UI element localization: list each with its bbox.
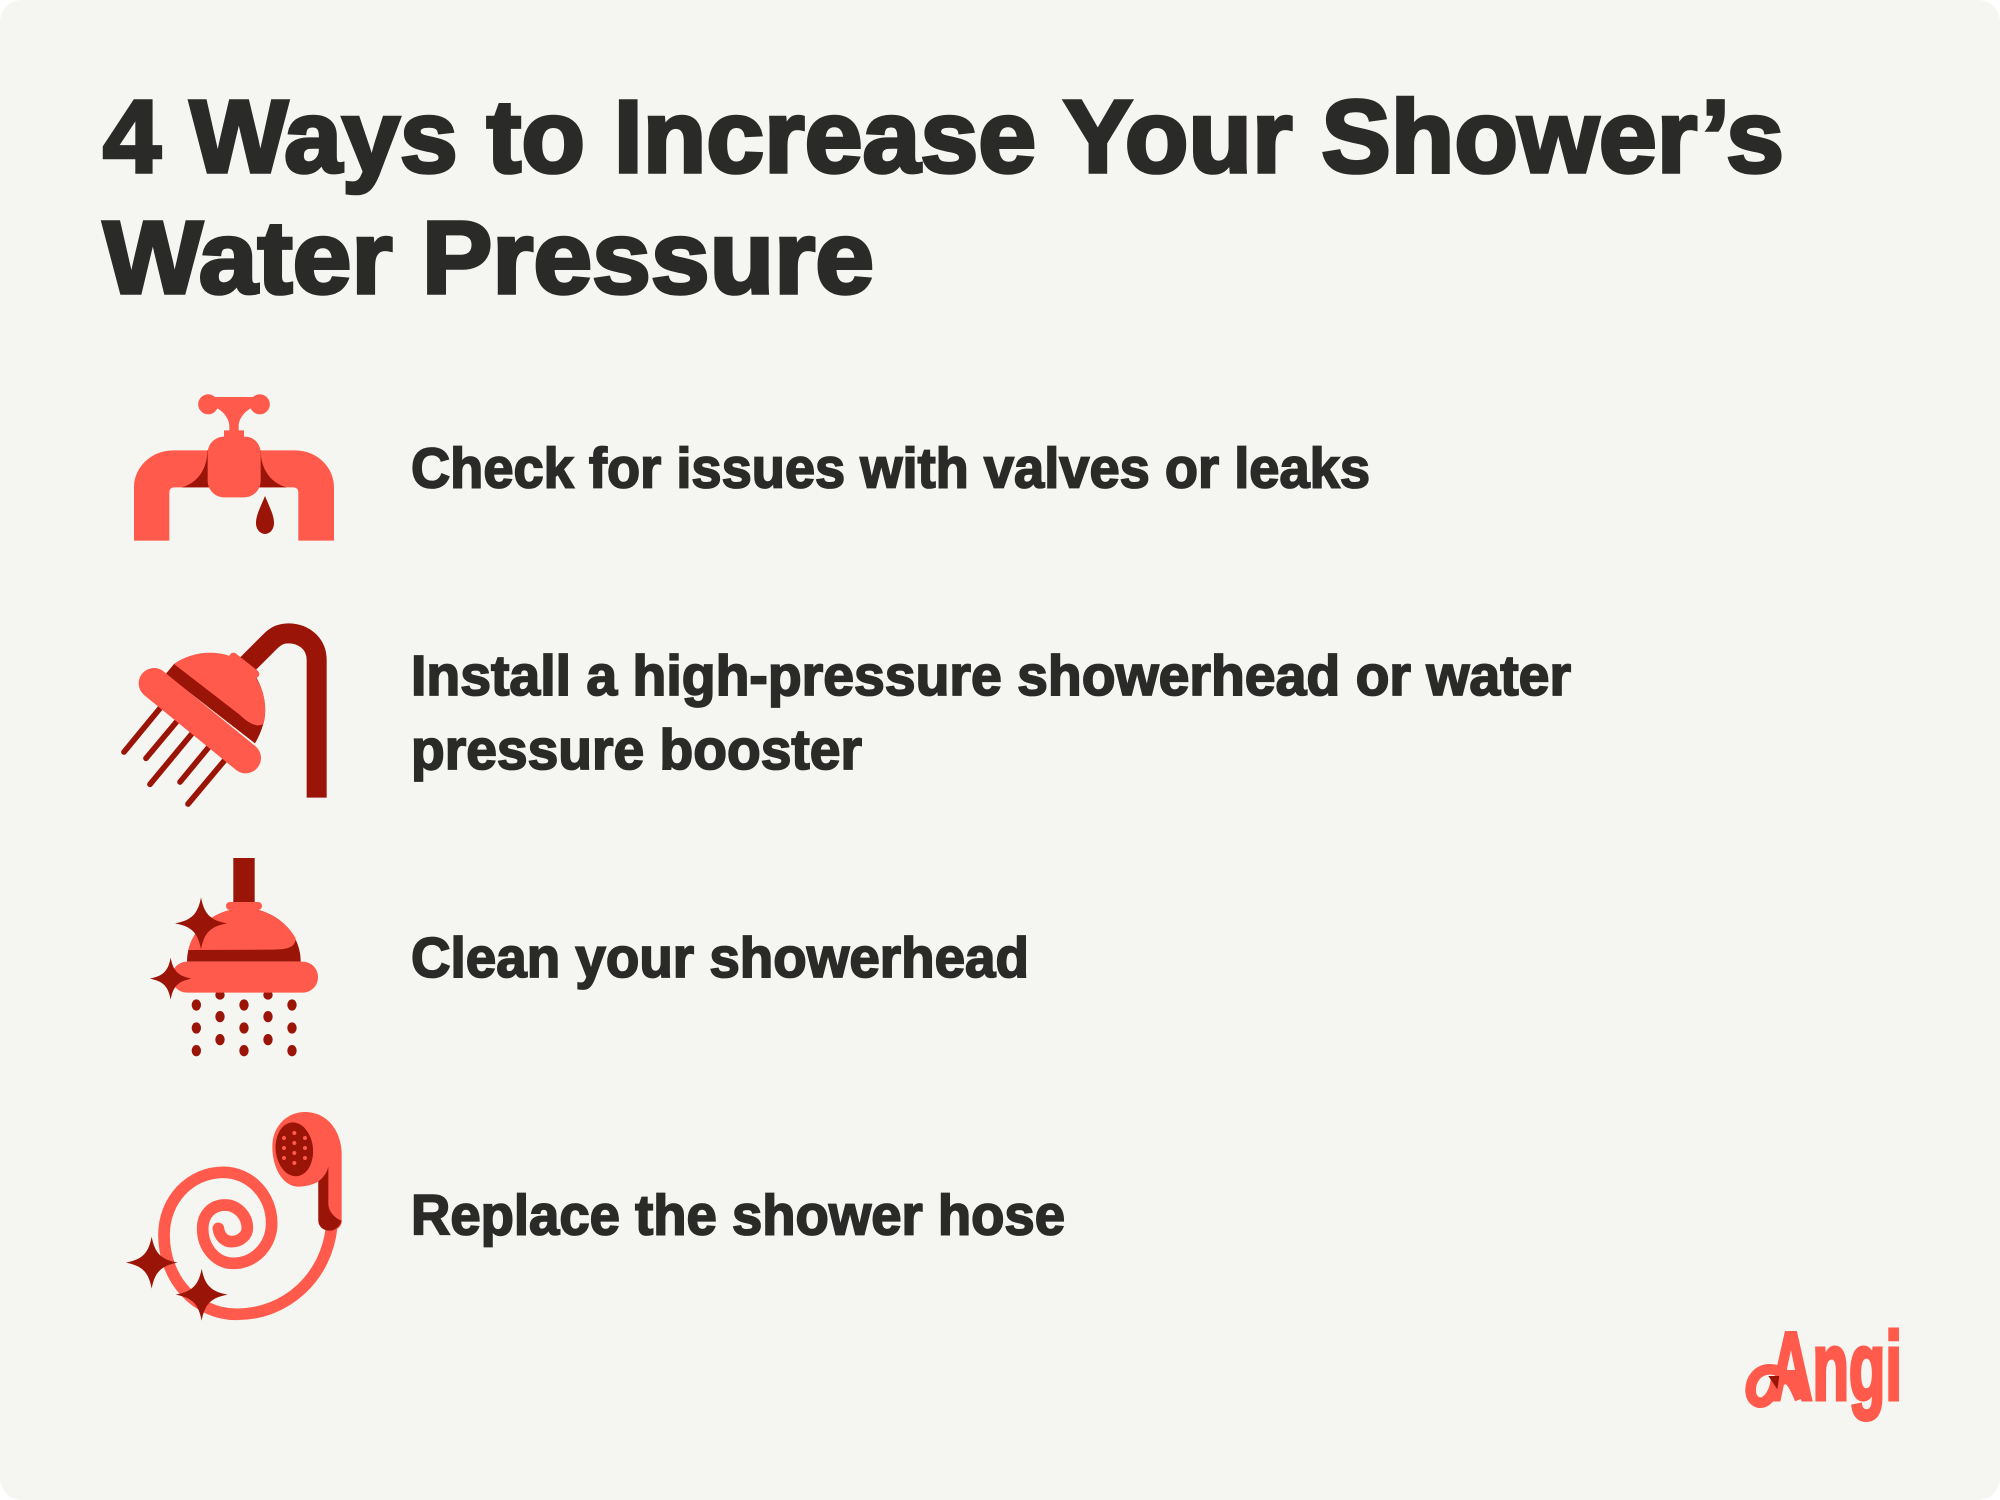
text: clean your showerhead: Clean your showerhead bbox=[411, 926, 1029, 990]
icon: sparkling showerhead bbox=[150, 858, 318, 1056]
title: Water Pressure bbox=[103, 200, 874, 315]
title bbox=[103, 79, 1784, 315]
text: check for issues: Check for issues with valves or leaks bbox=[411, 436, 1370, 500]
logo: Angi bbox=[1751, 1312, 1902, 1420]
text: replace the shower hose: Replace the shower hose bbox=[411, 1184, 1065, 1248]
icon: angled showerhead bbox=[124, 633, 317, 804]
text: install showerhead or booster: Install a high-pressure showerhead or water bbox=[411, 644, 1571, 708]
logo: Angi: Angi bbox=[1769, 1312, 1902, 1420]
icon: leaking faucet bbox=[134, 394, 334, 541]
text: install showerhead or booster: pressure booster bbox=[411, 718, 862, 782]
text: install showerhead or booster bbox=[411, 644, 1571, 782]
icon: coiled shower hose bbox=[126, 1112, 342, 1321]
title: 4 Ways to Increase Your Shower’s bbox=[103, 79, 1784, 194]
